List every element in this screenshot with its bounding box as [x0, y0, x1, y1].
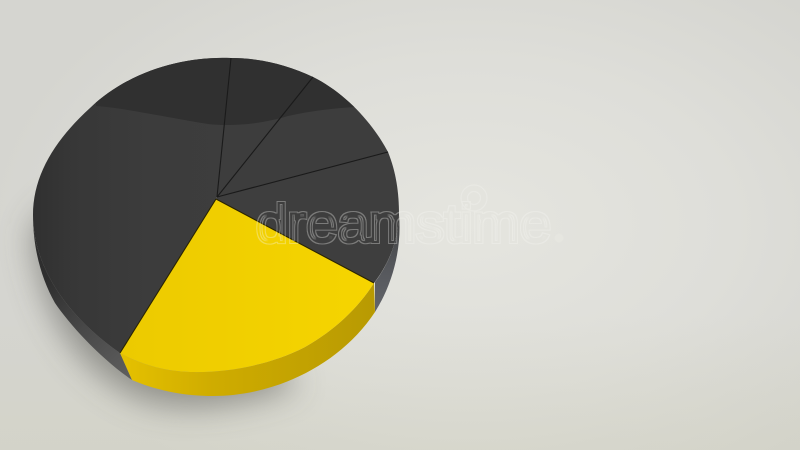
black slice, top narrow [217, 58, 313, 197]
yellow slice [120, 199, 374, 372]
black pie side wall, right [375, 215, 400, 312]
yellow slice side wall [120, 283, 375, 396]
watermark [256, 185, 564, 254]
black pie side wall, left [33, 215, 132, 380]
soft drop shadow under pie [32, 200, 300, 407]
watermark logo spiral [461, 185, 487, 211]
watermark registered mark [554, 234, 564, 242]
black slice, upper right [217, 77, 388, 197]
pie chart [33, 40, 400, 396]
glossy reflection band on top of pie [96, 58, 354, 125]
watermark wordmark: dreamstime [256, 194, 551, 254]
black slice, right [216, 152, 399, 283]
large black slice [33, 58, 231, 353]
slice divider lines [120, 58, 388, 353]
